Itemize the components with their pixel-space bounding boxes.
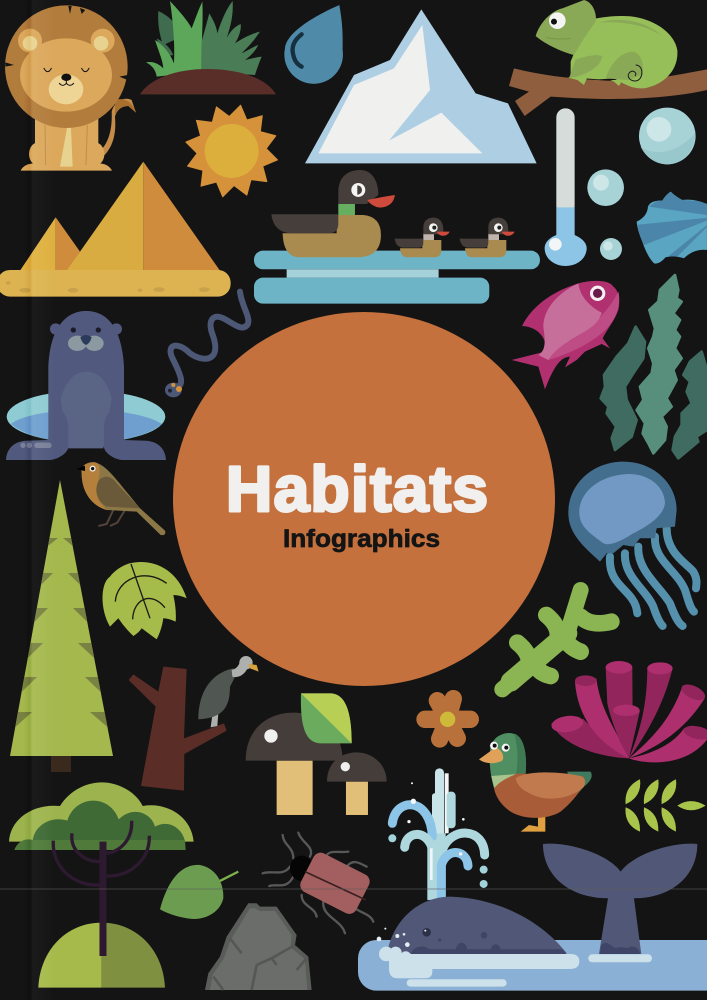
title: Habitats: Habitats bbox=[226, 453, 488, 525]
green coral bbox=[502, 590, 611, 689]
fir tree bbox=[10, 480, 113, 772]
sea otter in pool bbox=[6, 311, 166, 460]
ducklings bbox=[395, 218, 515, 257]
acacia tree on hill bbox=[9, 782, 194, 988]
subtitle: Infographics: Infographics bbox=[283, 525, 440, 553]
lion bbox=[5, 5, 136, 171]
whale tail bbox=[543, 844, 697, 962]
magenta coral bbox=[550, 661, 707, 762]
jellyfish bbox=[568, 462, 696, 626]
mother duck bbox=[271, 170, 395, 257]
sun bbox=[184, 103, 279, 199]
water and duck family bbox=[254, 251, 540, 304]
leaf sprig bbox=[625, 779, 706, 832]
snake bbox=[165, 292, 248, 397]
bare tree trunk with vulture bbox=[129, 656, 259, 791]
pyramids on sand bbox=[0, 162, 231, 297]
iceberg bbox=[305, 9, 537, 163]
beetle bbox=[263, 833, 373, 933]
mushrooms and leaf bbox=[246, 693, 387, 815]
mallard duck bbox=[479, 733, 592, 832]
bubbles bbox=[587, 108, 696, 260]
green leaf bbox=[160, 865, 238, 919]
thermometer bbox=[545, 108, 587, 266]
rock bbox=[205, 903, 312, 990]
whale and pool bbox=[358, 897, 707, 991]
lobed leaf bbox=[102, 562, 187, 639]
seashell bbox=[636, 192, 707, 267]
chameleon on branch bbox=[509, 0, 707, 116]
seaweed bbox=[601, 275, 707, 458]
flower bbox=[425, 699, 470, 739]
orange title circle bbox=[173, 312, 555, 686]
water drop bbox=[284, 5, 343, 84]
grass tuft on soil bbox=[140, 1, 276, 94]
fish bbox=[512, 281, 619, 389]
water spout fountain bbox=[388, 768, 488, 900]
robin bbox=[76, 462, 165, 535]
